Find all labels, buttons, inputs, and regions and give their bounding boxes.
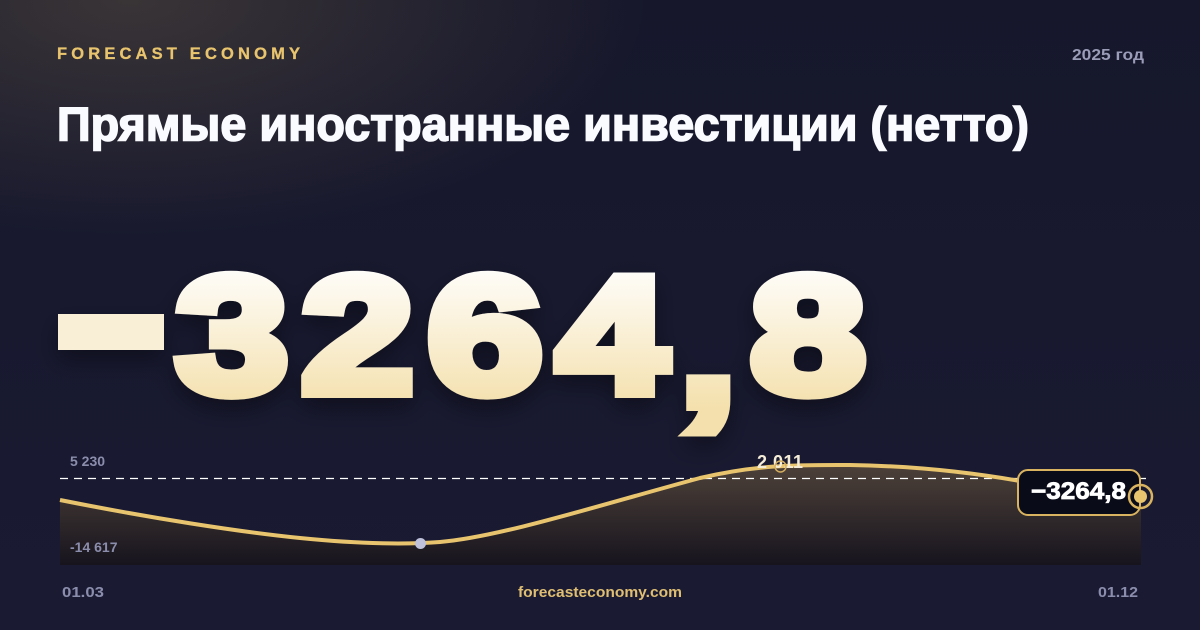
digit 8: 8 [751,243,865,427]
digit 2: 2 [302,243,413,428]
data line [60,465,1020,543]
axis max label: 5 230 [70,453,105,469]
value badge [1018,470,1140,515]
start date: 01.03 [62,584,104,601]
digit 6: 6 [428,243,542,427]
reference dashed line [60,478,1146,480]
minus sign [58,314,164,350]
comma: , [679,256,737,440]
area fill [60,465,1141,565]
website: forecasteconomy.com [518,584,682,601]
chart [60,452,1152,565]
max marker [775,461,786,472]
max label: 2 011 [757,452,803,472]
year label: 2025 год [1072,47,1144,64]
title: Прямые иностранные инвестиции (нетто) [57,98,1029,150]
digit 4: 4 [557,243,667,427]
brand label: FORECAST ECONOMY [57,45,300,63]
big value [58,243,865,440]
value badge: −3264,8 [1031,478,1126,505]
end marker [1129,485,1152,508]
min marker [415,538,426,549]
digit 3: 3 [176,243,288,428]
end date: 01.12 [1098,584,1138,601]
axis min label: -14 617 [70,539,118,555]
